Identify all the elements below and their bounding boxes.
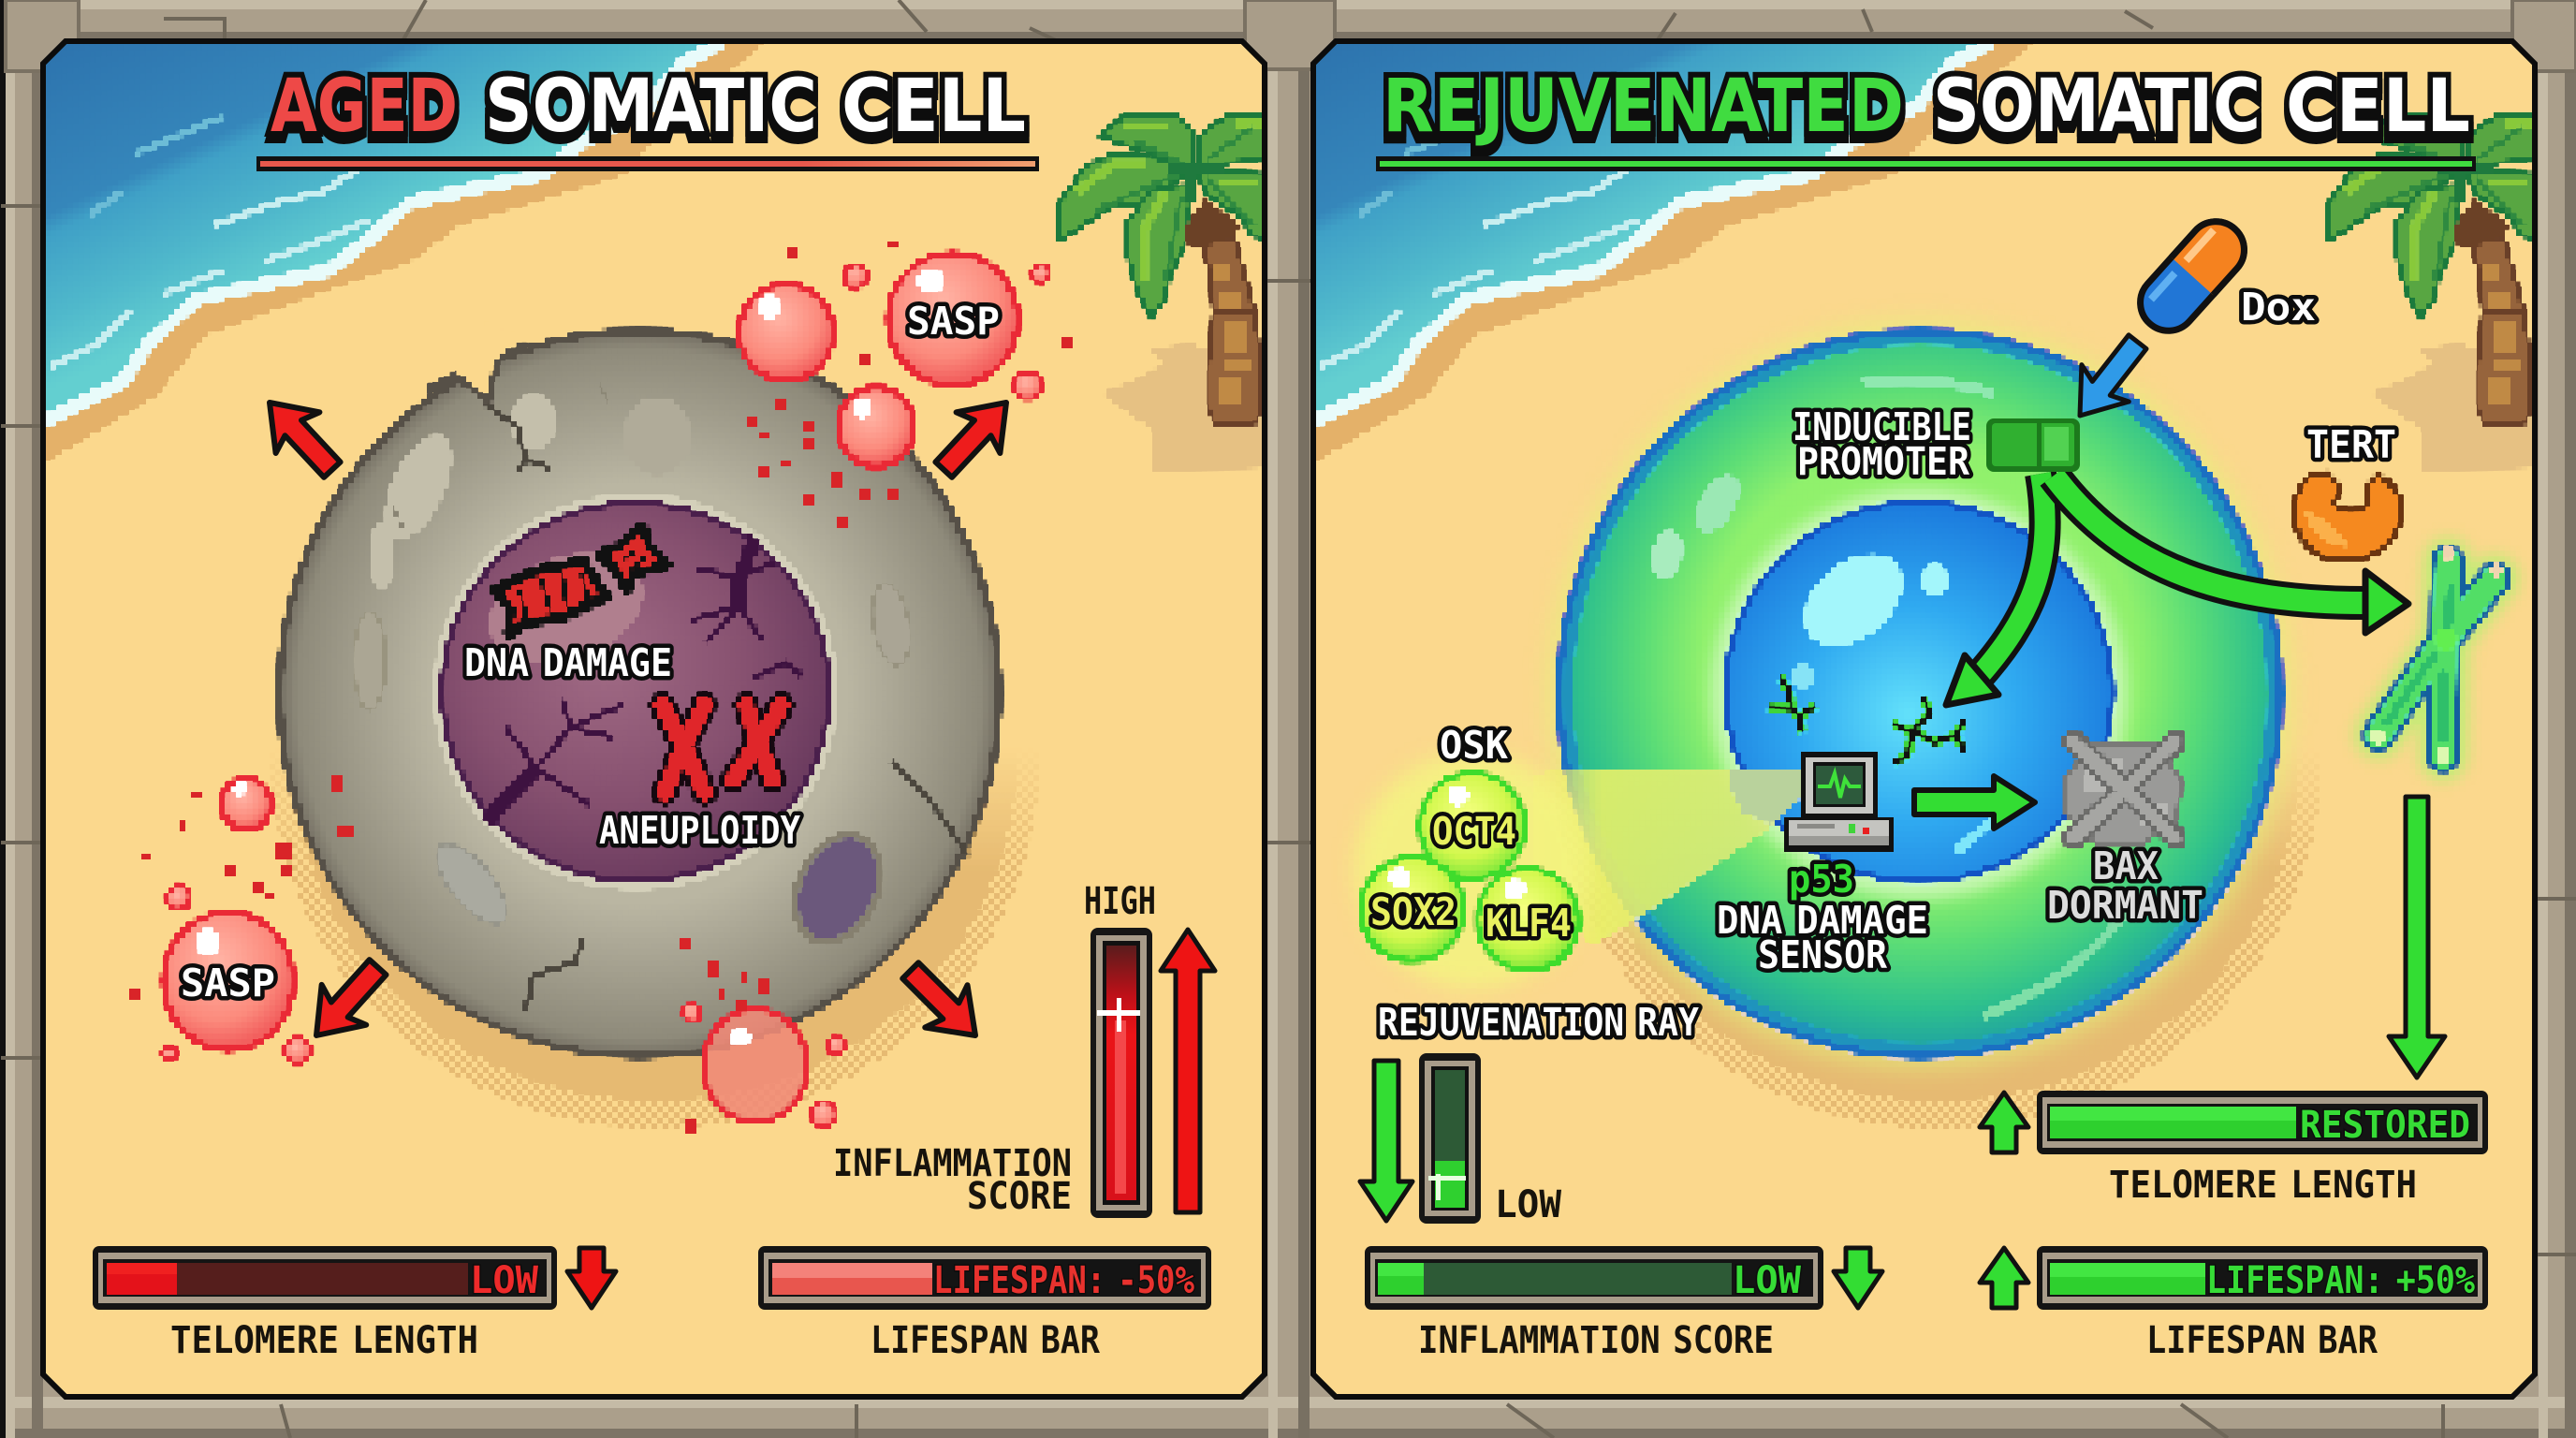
OSK factor bubbles [1355, 754, 1589, 988]
title: rejuvenated somatic cell: REJUVENATED [1383, 65, 1904, 149]
title: rejuvenated somatic cell: SOMATIC [1933, 65, 2261, 149]
label: inflammation score: INFLAMMATION [833, 1142, 1072, 1185]
arrow: lifespan increasing [1980, 1248, 2028, 1308]
arrow: down-right [889, 949, 997, 1057]
label: OCT4: OCT4 [1432, 809, 1516, 854]
telomere bar: restored [2037, 1091, 2488, 1154]
label: DNA damage sensor: DNA DAMAGE [1717, 898, 1928, 943]
icon: repaired DNA damage cracks [1767, 677, 1965, 763]
label: DNA DAMAGE: DNA DAMAGE [464, 640, 672, 685]
label: p53: p53 [1789, 857, 1854, 902]
label: inflammation score: INFLAMMATION SCORE [1418, 1319, 1774, 1362]
panel: rejuvenated somatic cell [1312, 41, 2539, 1397]
aged nucleus [439, 500, 832, 884]
SASP bubbles and debris, upper right [739, 241, 1072, 529]
label: BAX dormant: DORMANT [2047, 883, 2203, 928]
icon: BAX dormant, crossed out [2067, 741, 2181, 843]
title: rejuvenated somatic cell: CELL [2286, 65, 2470, 149]
label: LOW: LOW [1495, 1183, 1562, 1226]
arrow: up-right [922, 382, 1028, 490]
label: DNA damage sensor [1717, 898, 1928, 977]
lifespan bar: plus 50 percent [2037, 1246, 2488, 1310]
arrow: telomere decreasing [567, 1248, 616, 1308]
translucent bubble and debris, bottom [681, 937, 844, 1132]
icon: Dox capsule [2129, 210, 2256, 343]
arrow: p53 to BAX [1914, 776, 2035, 829]
icon: glowing chromosome [2378, 552, 2496, 756]
arrow: inflammation score decreasing [1834, 1248, 1882, 1308]
icon: TERT enzyme [2294, 473, 2401, 560]
beach background with ocean and palm tree [43, 41, 1269, 471]
icon: computer p53 sensor [1784, 752, 1894, 852]
arrow: inflammation falling [1360, 1061, 1412, 1221]
telomere bar: low: LOW [470, 1259, 539, 1302]
inflammation bar: low: LOW [1733, 1259, 1802, 1302]
aged cell [271, 323, 1039, 1128]
arrow: inflammation rising [1161, 930, 1215, 1212]
arrow: TERT to telomere [2389, 797, 2445, 1078]
lifespan bar: plus 50 percent: LIFESPAN: +50% [2206, 1259, 2475, 1302]
rejuvenation ray wedge [1535, 768, 1802, 946]
label: BAX dormant [2047, 844, 2203, 928]
label: ANEUPLOIDY: ANEUPLOIDY [599, 808, 800, 853]
lifespan bar: minus 50 percent: LIFESPAN: -50% [933, 1259, 1194, 1302]
label: OSK: OSK [1440, 723, 1508, 768]
label: telomere length: TELOMERE LENGTH [170, 1319, 478, 1362]
inflammation score gauge: high [1090, 928, 1152, 1218]
icon: damaged DNA [496, 526, 667, 635]
panel border: rejuvenated [1313, 41, 2535, 1397]
arrow: down-left [294, 947, 400, 1055]
inflammation bar: low [1365, 1246, 1823, 1310]
title underline [1376, 156, 2476, 171]
title: rejuvenated somatic cell [1383, 65, 2470, 149]
label: BAX dormant: BAX [2093, 844, 2159, 888]
label: lifespan bar: LIFESPAN BAR [871, 1319, 1101, 1362]
label: DNA damage sensor: SENSOR [1758, 932, 1887, 977]
label: HIGH: HIGH [1084, 880, 1156, 923]
title: aged somatic cell: AGED [271, 65, 458, 149]
label: inducible promoter [1793, 404, 1971, 484]
title underline [256, 156, 1039, 171]
label: inducible promoter: PROMOTER [1797, 439, 1969, 484]
arrow: Dox to promoter [2056, 323, 2161, 434]
telomere bar: restored: RESTORED [2300, 1104, 2470, 1147]
label: inducible promoter: INDUCIBLE [1793, 404, 1971, 449]
SASP label, lower: SASP [181, 961, 275, 1005]
label: TERT: TERT [2306, 422, 2396, 467]
arrow: telomere increasing [1980, 1093, 2028, 1152]
inflammation gauge: low [1419, 1053, 1481, 1224]
panel border: aged [43, 41, 1265, 1397]
title: aged somatic cell: SOMATIC [485, 65, 817, 149]
telomere bar: low [93, 1246, 557, 1310]
label: lifespan bar: LIFESPAN BAR [2146, 1319, 2378, 1362]
beach background with ocean and palm tree [1312, 41, 2539, 471]
label: Dox: Dox [2241, 285, 2316, 330]
label: SOX2: SOX2 [1370, 889, 1456, 934]
label: inflammation score: SCORE [967, 1175, 1072, 1218]
panel: aged somatic cell [43, 41, 1269, 1397]
label: inflammation score [833, 1142, 1072, 1218]
SASP label, upper: SASP [907, 299, 1000, 344]
SASP bubbles and debris, lower left [127, 777, 352, 1063]
lifespan bar: minus 50 percent [758, 1246, 1211, 1310]
rejuvenated nucleus [1722, 499, 2115, 885]
icon: aneuploidy chromosomes [662, 705, 782, 793]
icon: inducible promoter [1986, 418, 2080, 472]
label: telomere length: TELOMERE LENGTH [2109, 1164, 2417, 1207]
rejuvenated cell [1535, 319, 2321, 1128]
title: aged somatic cell: CELL [842, 65, 1026, 149]
label: rejuvenation ray: REJUVENATION RAY [1378, 1000, 1699, 1045]
arrow: up-left [248, 382, 354, 490]
arrow: promoter to chromosome [2054, 476, 2408, 633]
label: KLF4: KLF4 [1486, 901, 1572, 946]
title: aged somatic cell [271, 65, 1026, 149]
arrow: promoter to nucleus [1946, 474, 2045, 705]
